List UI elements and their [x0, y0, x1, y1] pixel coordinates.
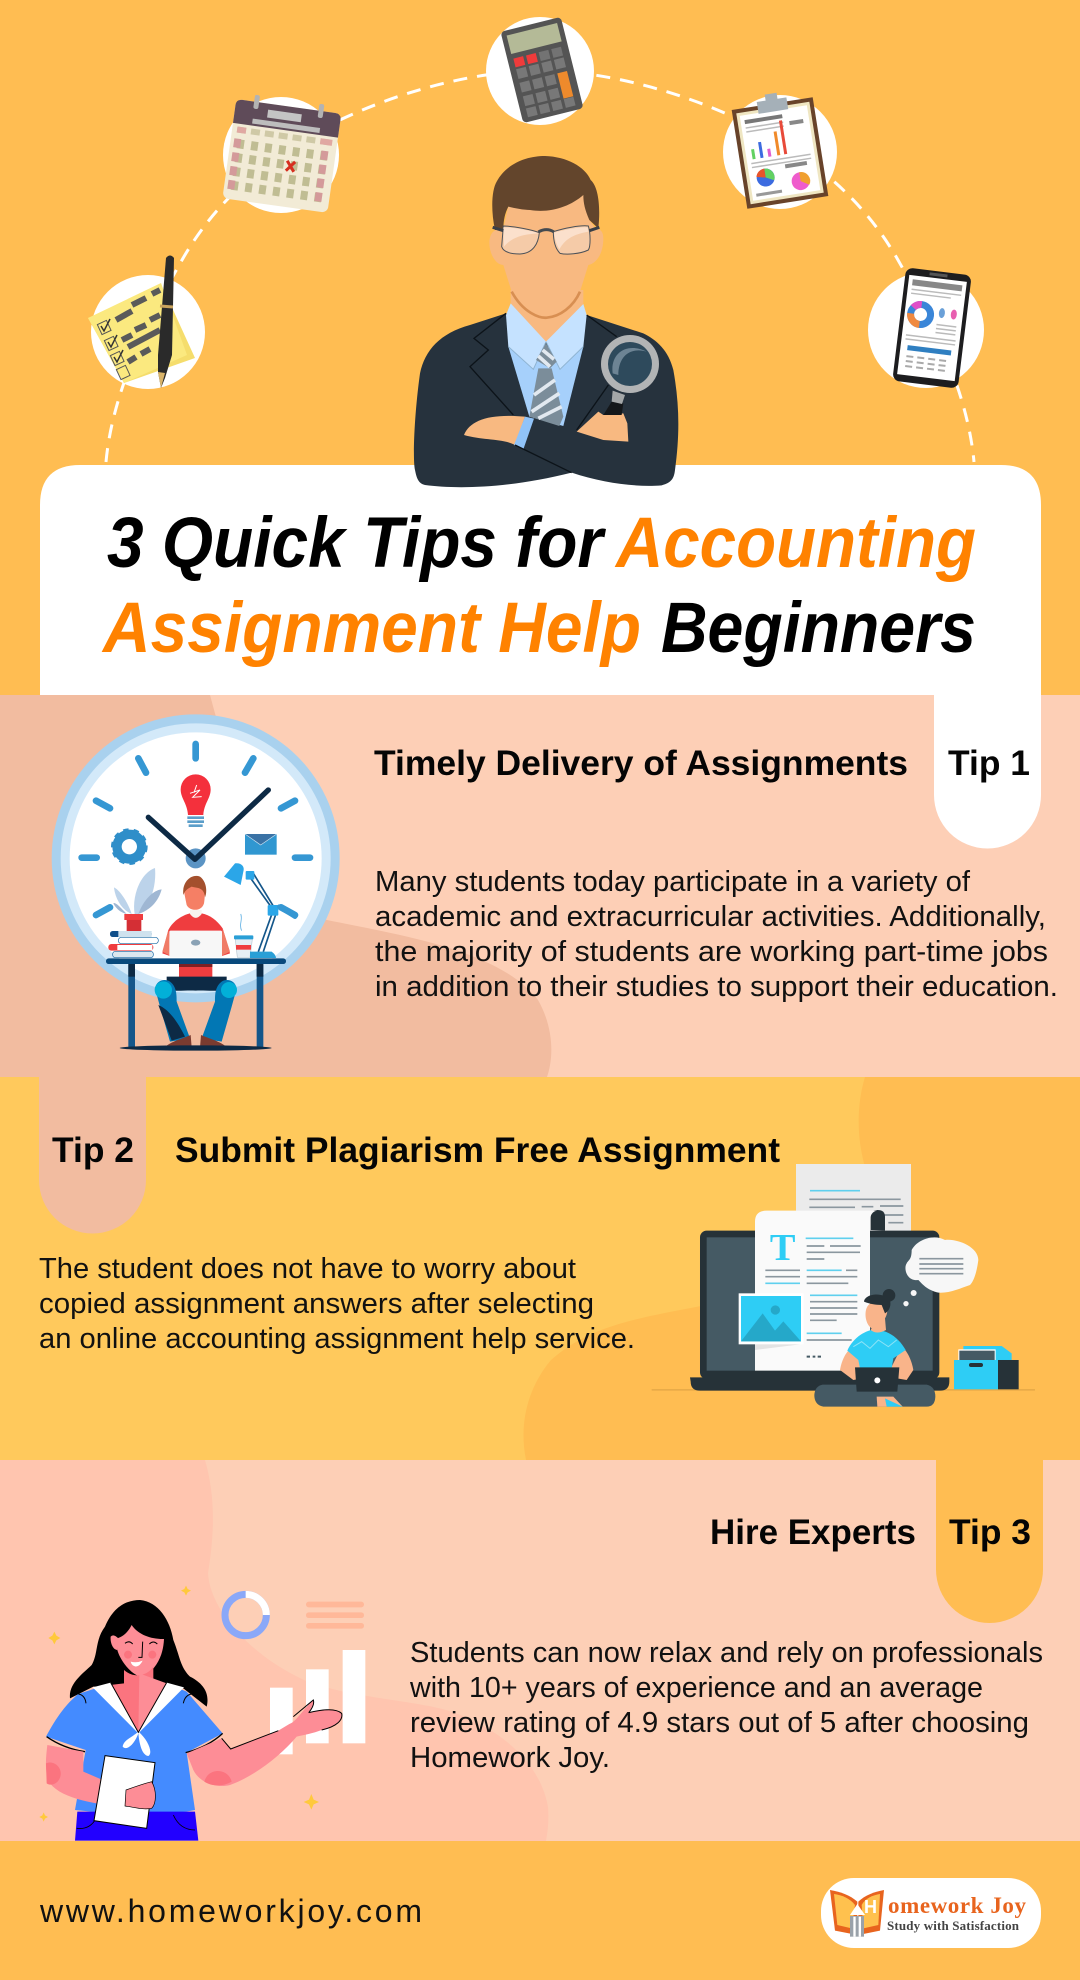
- section 3 background: [0, 1460, 1080, 1841]
- section 1 background: [0, 695, 1080, 1077]
- section 2 background: [0, 1077, 1080, 1460]
- tip 1 body: the majority of students are working part-time jobs: [375, 936, 1048, 968]
- tip 3 tag: Tip 3: [949, 1513, 1031, 1552]
- icon: phone report: [868, 267, 984, 389]
- footer logo: Study with Satisfaction: [887, 1918, 1020, 1933]
- tip 1 tag: Tip 1: [948, 744, 1030, 783]
- tip 2 tab: [39, 1077, 146, 1234]
- tip 3 body: Students can now relax and rely on professionals: [410, 1637, 1043, 1669]
- footer website url: www.homeworkjoy.com: [39, 1893, 422, 1929]
- icon: calendar: [222, 92, 342, 213]
- tip 2 body: an online accounting assignment help service.: [39, 1323, 635, 1355]
- tip 1 body: in addition to their studies to support their education.: [375, 971, 1058, 1003]
- icon: calculator: [486, 17, 594, 125]
- tip 3 body: with 10+ years of experience and an average: [409, 1672, 983, 1704]
- footer logo: H: [864, 1897, 877, 1917]
- illustration: clock with worker at desk: [52, 714, 340, 1051]
- title panel: [40, 465, 1041, 848]
- man with magnifier: [414, 156, 678, 487]
- tip 2 tag: Tip 2: [52, 1131, 134, 1170]
- tip 3 body: [409, 1637, 1043, 1774]
- title text: [101, 504, 976, 668]
- tip 2 body: The student does not have to worry about: [39, 1253, 576, 1285]
- title text: Assignment Help: [101, 589, 641, 668]
- icon: clipboard report: [723, 87, 837, 209]
- footer logo: [821, 1878, 1041, 1948]
- tip 2 heading: Submit Plagiarism Free Assignment: [175, 1131, 780, 1170]
- icon: open book logo: [830, 1890, 884, 1937]
- tip 2 body: copied assignment answers after selecting: [39, 1288, 594, 1320]
- tip 1 heading: Timely Delivery of Assignments: [374, 744, 908, 783]
- tip 3 body: Homework Joy.: [410, 1742, 610, 1774]
- title text: Beginners: [661, 589, 976, 668]
- title text: Accounting: [614, 504, 976, 583]
- tip 2 body: [39, 1253, 635, 1355]
- tip 3 body: review rating of 4.9 stars out of 5 after choosing: [410, 1707, 1029, 1739]
- footer logo: omework Joy: [888, 1893, 1026, 1918]
- tip 1 body: Many students today participate in a variety of: [375, 866, 971, 898]
- illustration: woman presenting chart: [39, 1586, 365, 1841]
- tip 3 heading: Hire Experts: [710, 1513, 916, 1552]
- dashed arc connecting icons: [106, 70, 974, 462]
- tip 1 body: academic and extracurricular activities. Additionally,: [375, 901, 1046, 933]
- illustration: laptop, document and student: [652, 1164, 1035, 1407]
- tip 3 tab: [936, 1460, 1043, 1623]
- title text: 3 Quick Tips for: [107, 504, 606, 583]
- tip 1 body: [375, 866, 1058, 1003]
- icon: checklist and pen: [88, 256, 205, 389]
- illustration: laptop, document and student: T: [770, 1227, 795, 1269]
